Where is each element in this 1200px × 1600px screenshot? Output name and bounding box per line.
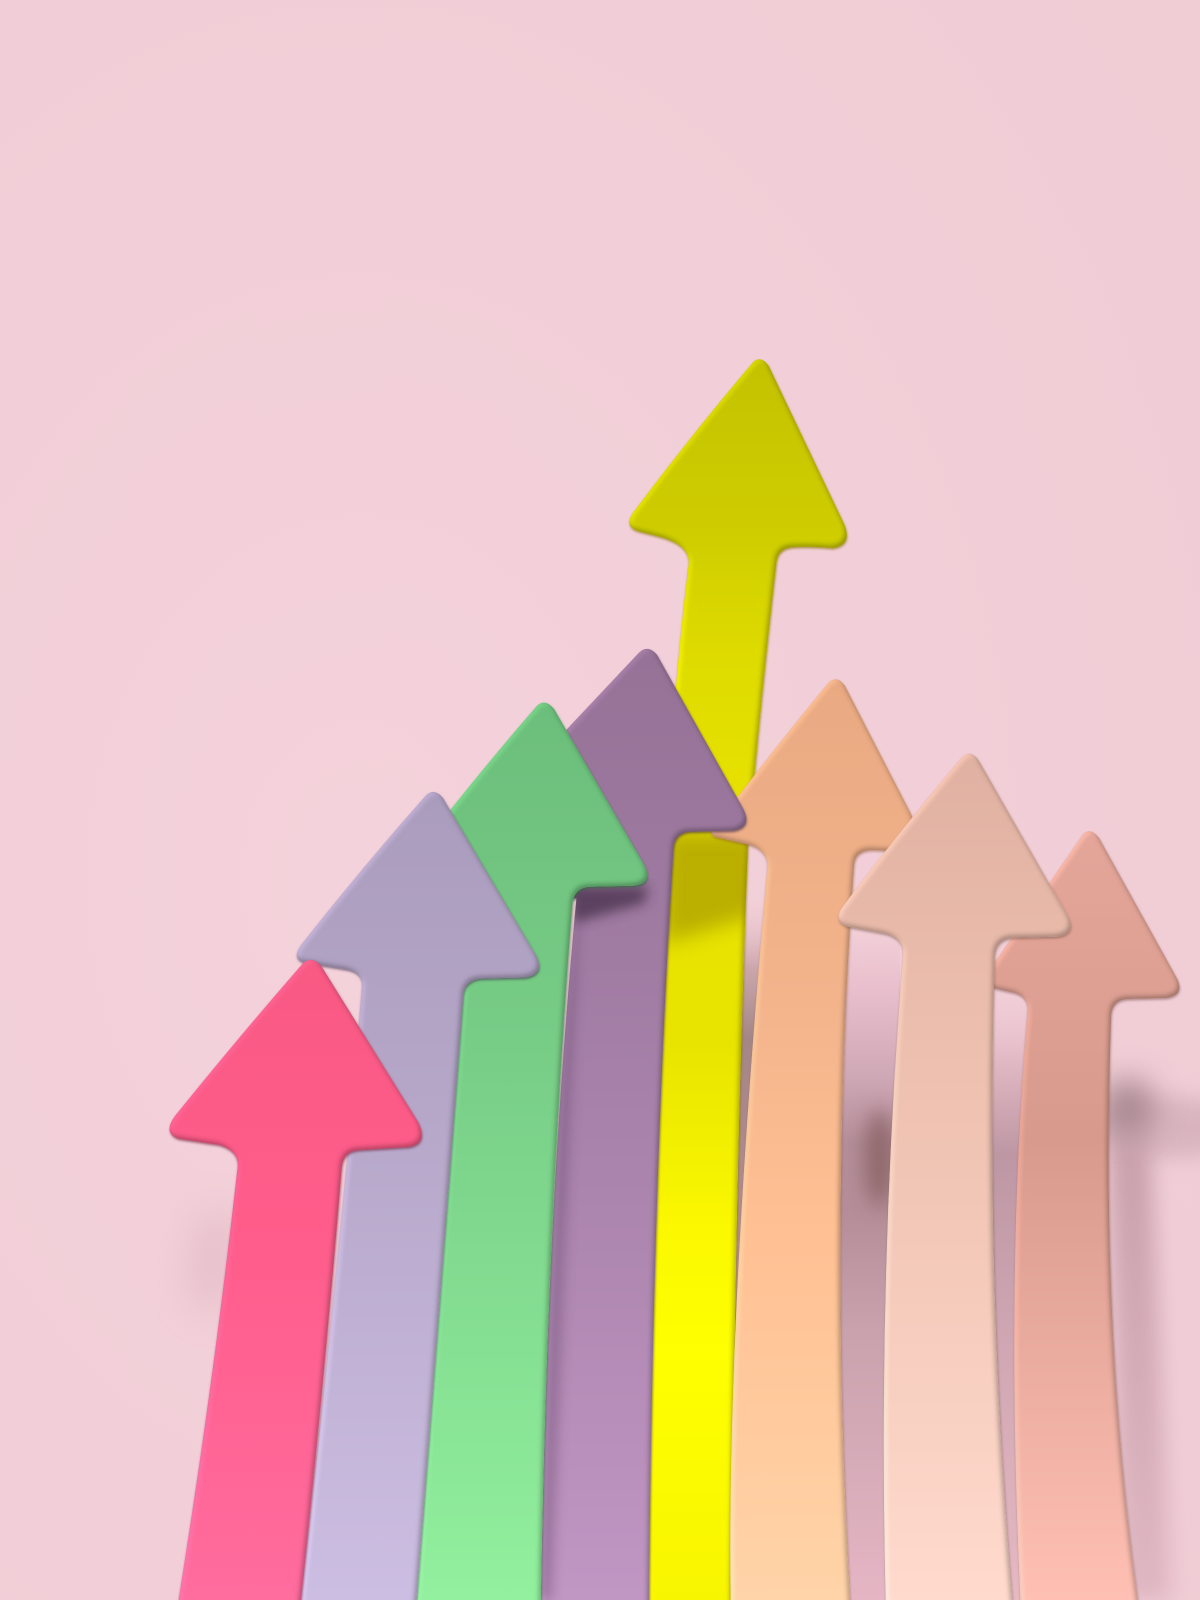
arrow: peach bbox=[711, 679, 924, 1600]
arrow: lavender bbox=[297, 792, 540, 1600]
arrow: yellow bbox=[629, 359, 847, 1600]
shadow under green head and along shaft bbox=[537, 886, 648, 1600]
arrow: green bbox=[367, 703, 648, 1600]
arrow: purple bbox=[541, 648, 748, 1600]
cast shadows on the wall bbox=[189, 898, 1200, 1600]
arrow: cream bbox=[838, 754, 1071, 1600]
illustration: rising colourful arrows bbox=[168, 359, 1200, 1600]
shadow under purple head bbox=[668, 832, 748, 950]
arrow: pink bbox=[170, 960, 422, 1600]
arrow: salmon bbox=[980, 831, 1180, 1600]
